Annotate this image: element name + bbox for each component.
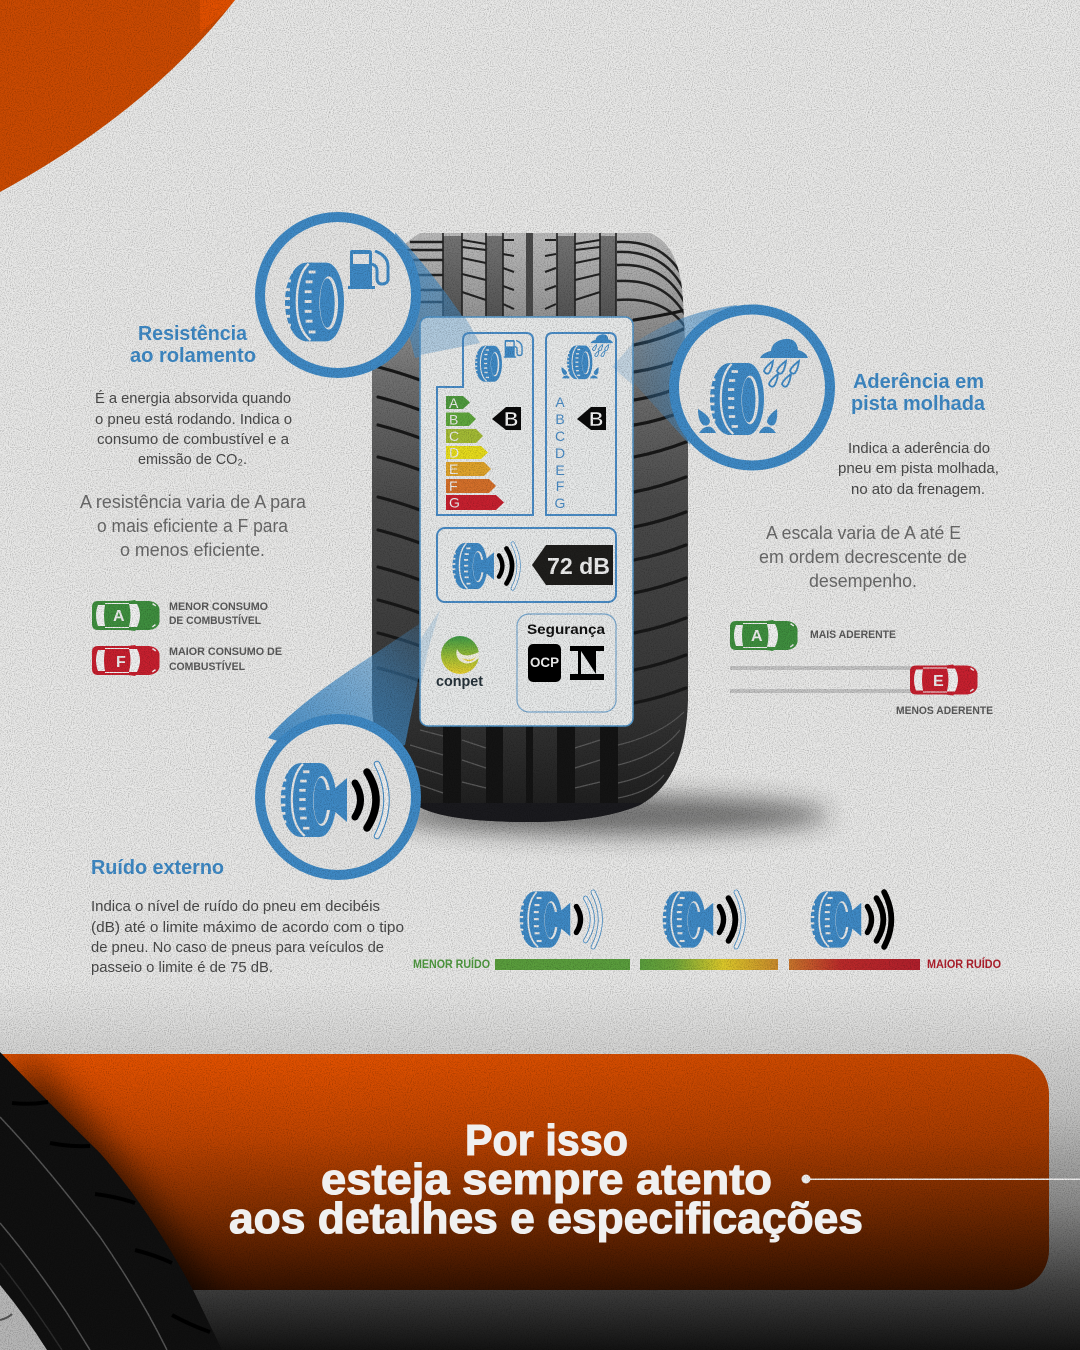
text: rolling resistance description bbox=[95, 390, 292, 468]
circle: noise bbox=[260, 719, 416, 875]
legend: fuel consumption: DE COMBUSTÍVEL bbox=[169, 614, 261, 627]
beam: rolling resistance bbox=[395, 232, 480, 358]
text: rolling resistance scale: o mais eficiente a F para bbox=[97, 516, 289, 536]
text: wet grip description: no ato da frenagem. bbox=[851, 481, 985, 498]
wheel at bottom-left corner bbox=[0, 1052, 222, 1350]
icon: tire and fuel pump bbox=[475, 340, 522, 382]
banner headline: esteja sempre atento bbox=[321, 1155, 772, 1204]
text: wet grip scale: desempenho. bbox=[809, 571, 917, 591]
text: rolling resistance description: o pneu está rodando. Indica o bbox=[95, 411, 292, 428]
energy scale A to G: B bbox=[449, 412, 458, 428]
text: wet grip scale: em ordem decrescente de bbox=[759, 547, 967, 567]
text: rolling resistance scale bbox=[80, 492, 307, 560]
car: A green bbox=[92, 600, 160, 631]
text: rolling resistance description: emissão de CO₂. bbox=[138, 451, 247, 468]
logo: conpet bbox=[436, 636, 483, 690]
legend: fuel consumption bbox=[92, 600, 282, 676]
text: wet grip scale bbox=[759, 523, 967, 591]
energy scale A to G: F bbox=[449, 478, 458, 494]
top-left orange corner bbox=[0, 0, 235, 192]
icon: low noise bbox=[520, 891, 600, 948]
car: A green: A bbox=[751, 628, 763, 645]
heading: Resistência ao rolamento bbox=[130, 323, 256, 367]
safety seal box bbox=[517, 614, 616, 712]
icon: tire and rain bbox=[698, 339, 808, 435]
car: E red bbox=[910, 664, 978, 696]
noise scale bbox=[413, 891, 1001, 971]
text: rolling resistance description: consumo de combustível e a bbox=[97, 431, 290, 448]
legend: fuel consumption: MENOR CONSUMO bbox=[169, 601, 268, 613]
noise scale: MENOR RUÍDO bbox=[413, 956, 490, 971]
car: F red: F bbox=[116, 654, 126, 671]
rating marker B bbox=[492, 407, 521, 431]
heading: Ruído externo: Ruído externo bbox=[91, 857, 224, 879]
legend: fuel consumption: COMBUSTÍVEL bbox=[169, 660, 245, 673]
grip scale letters: C bbox=[555, 428, 565, 444]
wheel shadow bbox=[2, 1054, 224, 1290]
banner bbox=[0, 1054, 1049, 1290]
text: noise description bbox=[91, 898, 404, 976]
text: noise description: (dB) até o limite máximo de acordo com o tipo bbox=[91, 919, 404, 936]
beam: wet grip bbox=[634, 305, 737, 445]
heading: Resistência ao rolamento: ao rolamento bbox=[130, 345, 256, 367]
grip scale letters: A bbox=[555, 394, 565, 410]
heading: Aderência em pista molhada: pista molhada bbox=[851, 393, 986, 415]
safety seal box: Segurança bbox=[527, 621, 605, 637]
text: wet grip description: pneu em pista molhada, bbox=[838, 460, 999, 477]
energy scale A to G: C bbox=[449, 428, 459, 444]
tire illustration bbox=[372, 232, 690, 823]
noise value bbox=[532, 545, 613, 585]
heading: Aderência em pista molhada: Aderência em bbox=[853, 371, 984, 393]
energy scale A to G: G bbox=[449, 494, 460, 510]
rating marker B: B bbox=[589, 409, 603, 431]
car: F red bbox=[92, 645, 160, 676]
grip scale letters: B bbox=[555, 411, 565, 427]
label box: noise bbox=[437, 528, 616, 602]
text: rolling resistance description: É a energia absorvida quando bbox=[95, 390, 291, 407]
label box: wet grip bbox=[546, 333, 616, 515]
grip scale letters: G bbox=[555, 495, 565, 511]
text: noise description: Indica o nível de ruído do pneu em decibéis bbox=[91, 898, 380, 915]
label box: fuel efficiency bbox=[437, 333, 533, 515]
car: A green bbox=[730, 620, 798, 651]
rating marker B bbox=[577, 407, 606, 431]
icon: tire and fuel pump bbox=[285, 250, 388, 341]
text: rolling resistance scale: o menos eficiente. bbox=[120, 540, 265, 560]
panel: tire label bbox=[420, 317, 633, 726]
banner headline: Por isso bbox=[465, 1116, 628, 1165]
icon: tire and rain bbox=[561, 334, 613, 379]
circle: wet grip bbox=[674, 310, 830, 466]
energy scale A to G: E bbox=[449, 461, 458, 477]
noise scale: MAIOR RUÍDO bbox=[927, 956, 1001, 971]
legend: fuel consumption: MAIOR CONSUMO DE bbox=[169, 646, 282, 658]
circle: rolling resistance bbox=[260, 217, 416, 373]
bottom gradient band bbox=[0, 980, 1080, 1350]
beam: noise bbox=[268, 610, 440, 760]
energy scale A to G: D bbox=[449, 444, 459, 460]
text: rolling resistance scale: A resistência varia de A para bbox=[80, 492, 307, 512]
grip scale letters: F bbox=[556, 478, 564, 494]
energy scale A to G: A bbox=[449, 395, 459, 411]
connector line and dot bbox=[802, 1174, 1080, 1184]
logo: conpet: conpet bbox=[436, 673, 483, 690]
text: wet grip description: Indica a aderência do bbox=[848, 440, 990, 457]
legend: grip: MAIS ADERENTE bbox=[810, 629, 896, 641]
text: noise description: de pneu. No caso de pneus para veículos de bbox=[91, 939, 384, 956]
grip scale letters: D bbox=[555, 445, 565, 461]
banner headline: aos detalhes e especificações bbox=[229, 1194, 863, 1243]
safety seal box: OCP bbox=[530, 655, 559, 670]
rating marker B: B bbox=[504, 409, 518, 431]
legend: grip: MENOS ADERENTE bbox=[896, 705, 993, 717]
icon: high noise bbox=[811, 891, 891, 948]
noise value: 72 dB bbox=[547, 553, 610, 579]
heading: Resistência ao rolamento: Resistência bbox=[138, 323, 248, 345]
banner headline bbox=[229, 1116, 863, 1243]
grip scale letters: E bbox=[555, 462, 565, 478]
car: A green: A bbox=[113, 608, 125, 625]
car: E red: E bbox=[933, 673, 944, 690]
text: wet grip scale: A escala varia de A até E bbox=[766, 523, 961, 543]
energy scale A to G bbox=[446, 395, 504, 510]
icon: noise bbox=[452, 543, 519, 589]
heading: Aderência em pista molhada bbox=[851, 371, 986, 415]
icon: medium noise bbox=[663, 891, 743, 948]
icon: tire and sound waves bbox=[281, 763, 386, 837]
tire shadow bbox=[390, 795, 830, 835]
legend: grip bbox=[730, 620, 993, 717]
text: wet grip description bbox=[838, 440, 999, 498]
text: noise description: passeio o limite é de 75 dB. bbox=[91, 959, 273, 976]
grip scale letters bbox=[555, 394, 565, 511]
